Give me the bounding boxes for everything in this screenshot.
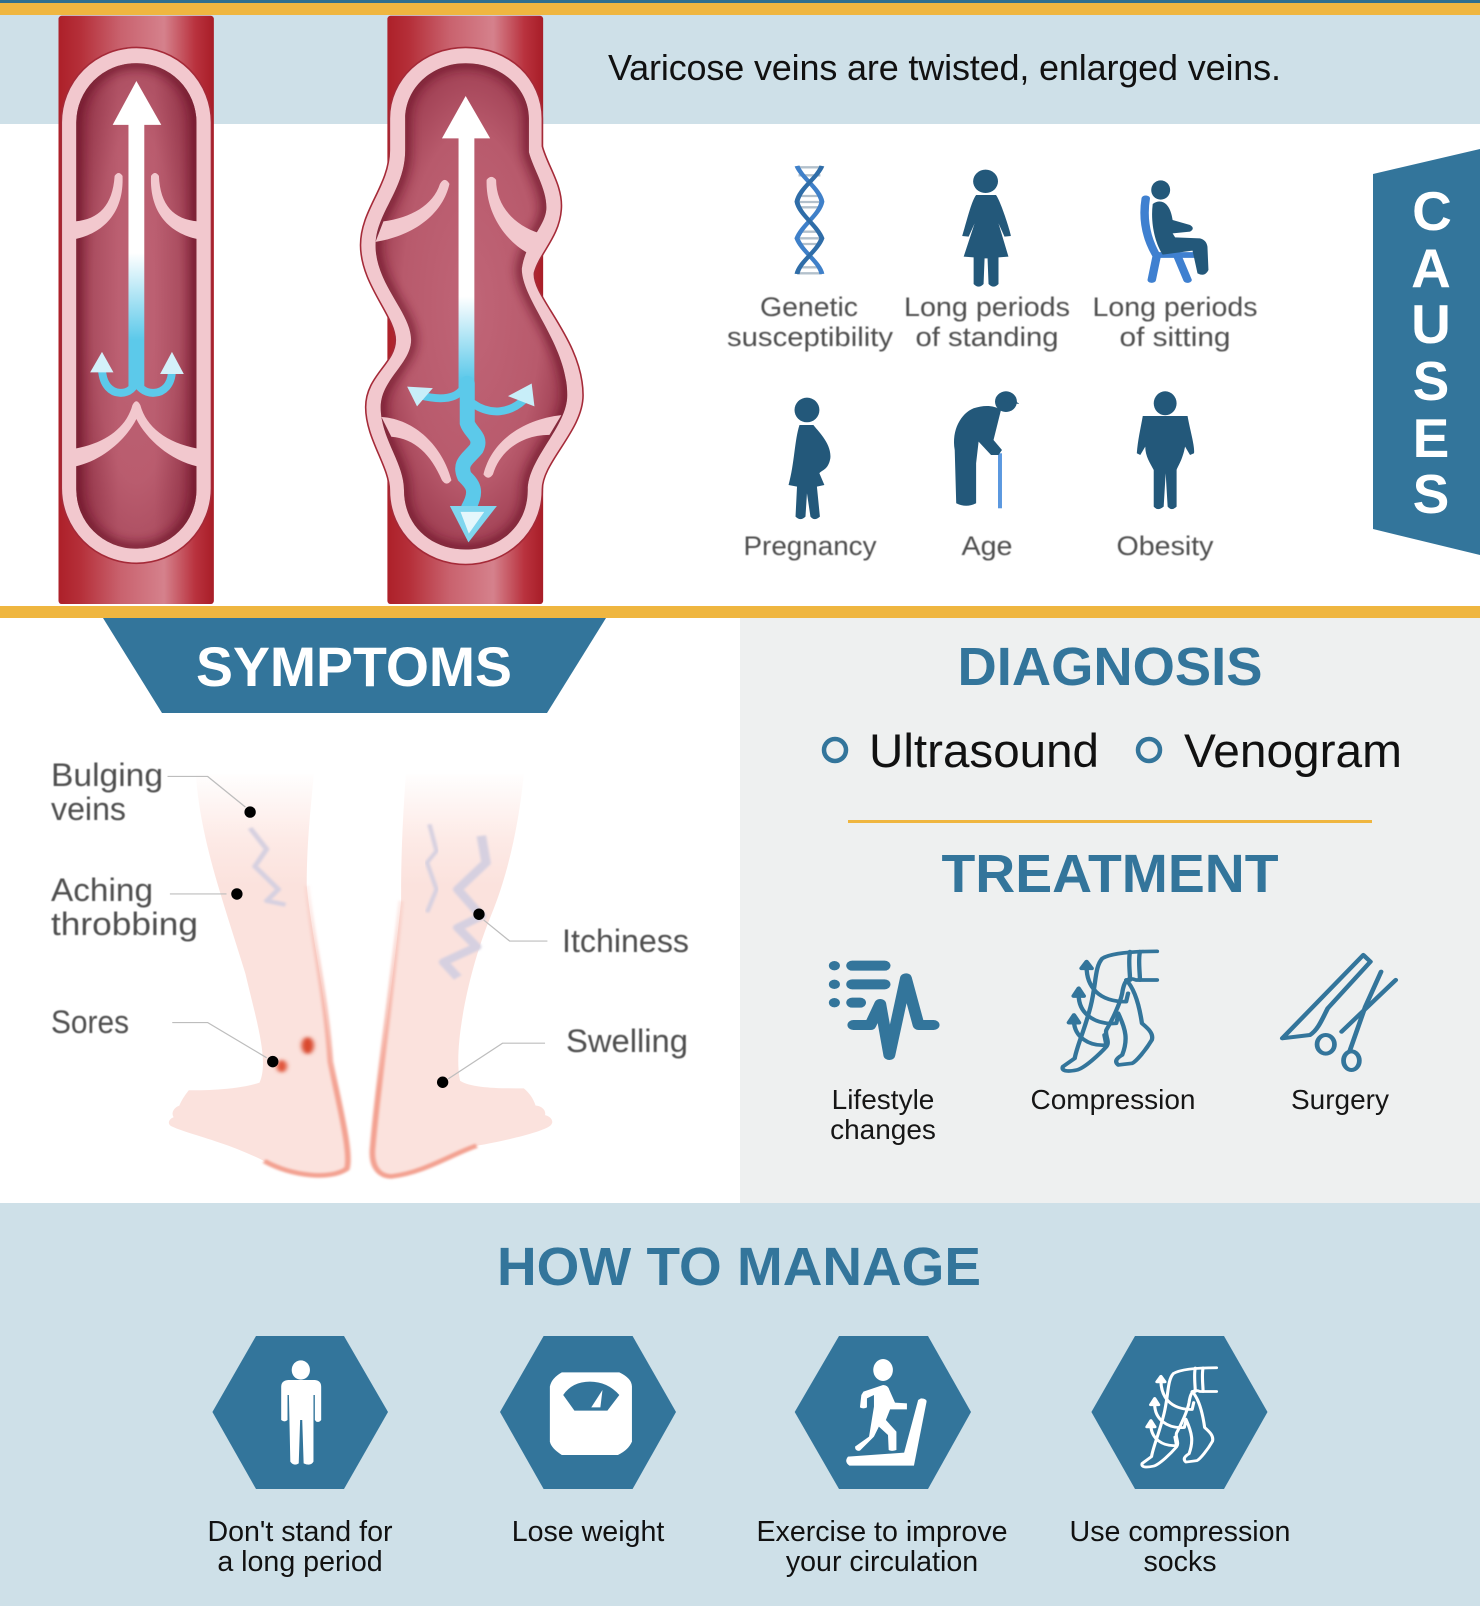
heading: how to manage: HOW TO MANAGE (497, 1237, 981, 1297)
manage item: exercise: your circulation (786, 1546, 978, 1578)
manage item: don't stand: Don't stand for (207, 1516, 393, 1548)
manage item: exercise (756, 1336, 1008, 1578)
heading: diagnosis: DIAGNOSIS (958, 637, 1262, 697)
manage item: exercise: Exercise to improve (756, 1516, 1008, 1548)
cause labels: Obesity (1116, 531, 1214, 561)
divider (848, 820, 1372, 823)
icon: surgery (1282, 955, 1396, 1070)
icon: standing (962, 170, 1011, 287)
icon: sitting (1145, 180, 1208, 280)
causes banner: E (1413, 407, 1449, 469)
cause labels: Genetic (760, 292, 858, 322)
icon: compression (1063, 951, 1157, 1071)
treatment labels (830, 1084, 1389, 1145)
cause labels: of standing (916, 322, 1058, 352)
leader lines (168, 776, 547, 1079)
intro band (0, 15, 1480, 124)
symptom labels: Itchiness (562, 923, 689, 959)
symptoms banner (103, 618, 606, 713)
treatment labels: Lifestyle (832, 1084, 934, 1115)
right leg (372, 775, 552, 1176)
causes banner: S (1413, 350, 1449, 412)
manage panel background (0, 1203, 1480, 1606)
symptom labels (51, 757, 689, 1059)
icon: dna (797, 166, 822, 274)
top stripe (0, 0, 1480, 15)
symptom labels: veins (51, 791, 126, 827)
causes banner: A (1411, 237, 1451, 299)
diagnosis option: ultrasound: Ultrasound (869, 724, 1099, 777)
cause labels: Pregnancy (744, 531, 877, 561)
treatment labels: Compression (1031, 1084, 1195, 1115)
left leg (169, 775, 348, 1175)
causes banner: S (1413, 463, 1449, 525)
cause labels (727, 292, 1258, 561)
symptom labels: Aching (51, 872, 153, 908)
causes banner (1373, 149, 1480, 555)
diagnosis option: venogram: Venogram (1184, 724, 1402, 777)
manage item: compression socks: Use compression (1070, 1516, 1290, 1548)
icon: lifestyle changes (829, 961, 934, 1055)
manage item: compression socks: socks (1143, 1546, 1217, 1578)
icon: pregnancy (789, 398, 830, 519)
cause labels: Long periods (1092, 292, 1258, 322)
symptom labels: Swelling (566, 1023, 688, 1059)
illustration: varicose vein (361, 16, 583, 604)
icon: obesity (1137, 391, 1194, 509)
causes banner: U (1411, 293, 1451, 355)
manage item: lose weight (500, 1336, 676, 1548)
manage item: don't stand (207, 1336, 393, 1578)
manage item: compression socks (1070, 1336, 1290, 1578)
panel: causes icons (789, 166, 1208, 519)
diagnosis panel background (740, 617, 1480, 1203)
symptom labels: throbbing (51, 906, 198, 942)
heading: treatment: TREATMENT (942, 844, 1279, 904)
icon: age (954, 391, 1019, 508)
cause labels: susceptibility (727, 322, 894, 352)
symptom markers (231, 806, 485, 1088)
manage item: lose weight: Lose weight (512, 1516, 664, 1548)
cause labels: Long periods (904, 292, 1070, 322)
symptom labels: Sores (51, 1004, 129, 1040)
illustration: legs (168, 775, 552, 1176)
illustration: healthy vein (59, 16, 214, 604)
divider stripe (0, 606, 1480, 618)
causes banner: C (1412, 180, 1452, 242)
symptom labels: Bulging (51, 757, 163, 793)
cause labels: Age (962, 531, 1012, 561)
treatment labels: changes (830, 1114, 936, 1145)
cause labels: of sitting (1120, 322, 1230, 352)
intro text: Varicose veins are twisted, enlarged veins. (608, 47, 1281, 88)
treatment labels: Surgery (1291, 1084, 1389, 1115)
manage item: don't stand: a long period (217, 1546, 383, 1578)
symptoms banner: SYMPTOMS (196, 635, 512, 698)
